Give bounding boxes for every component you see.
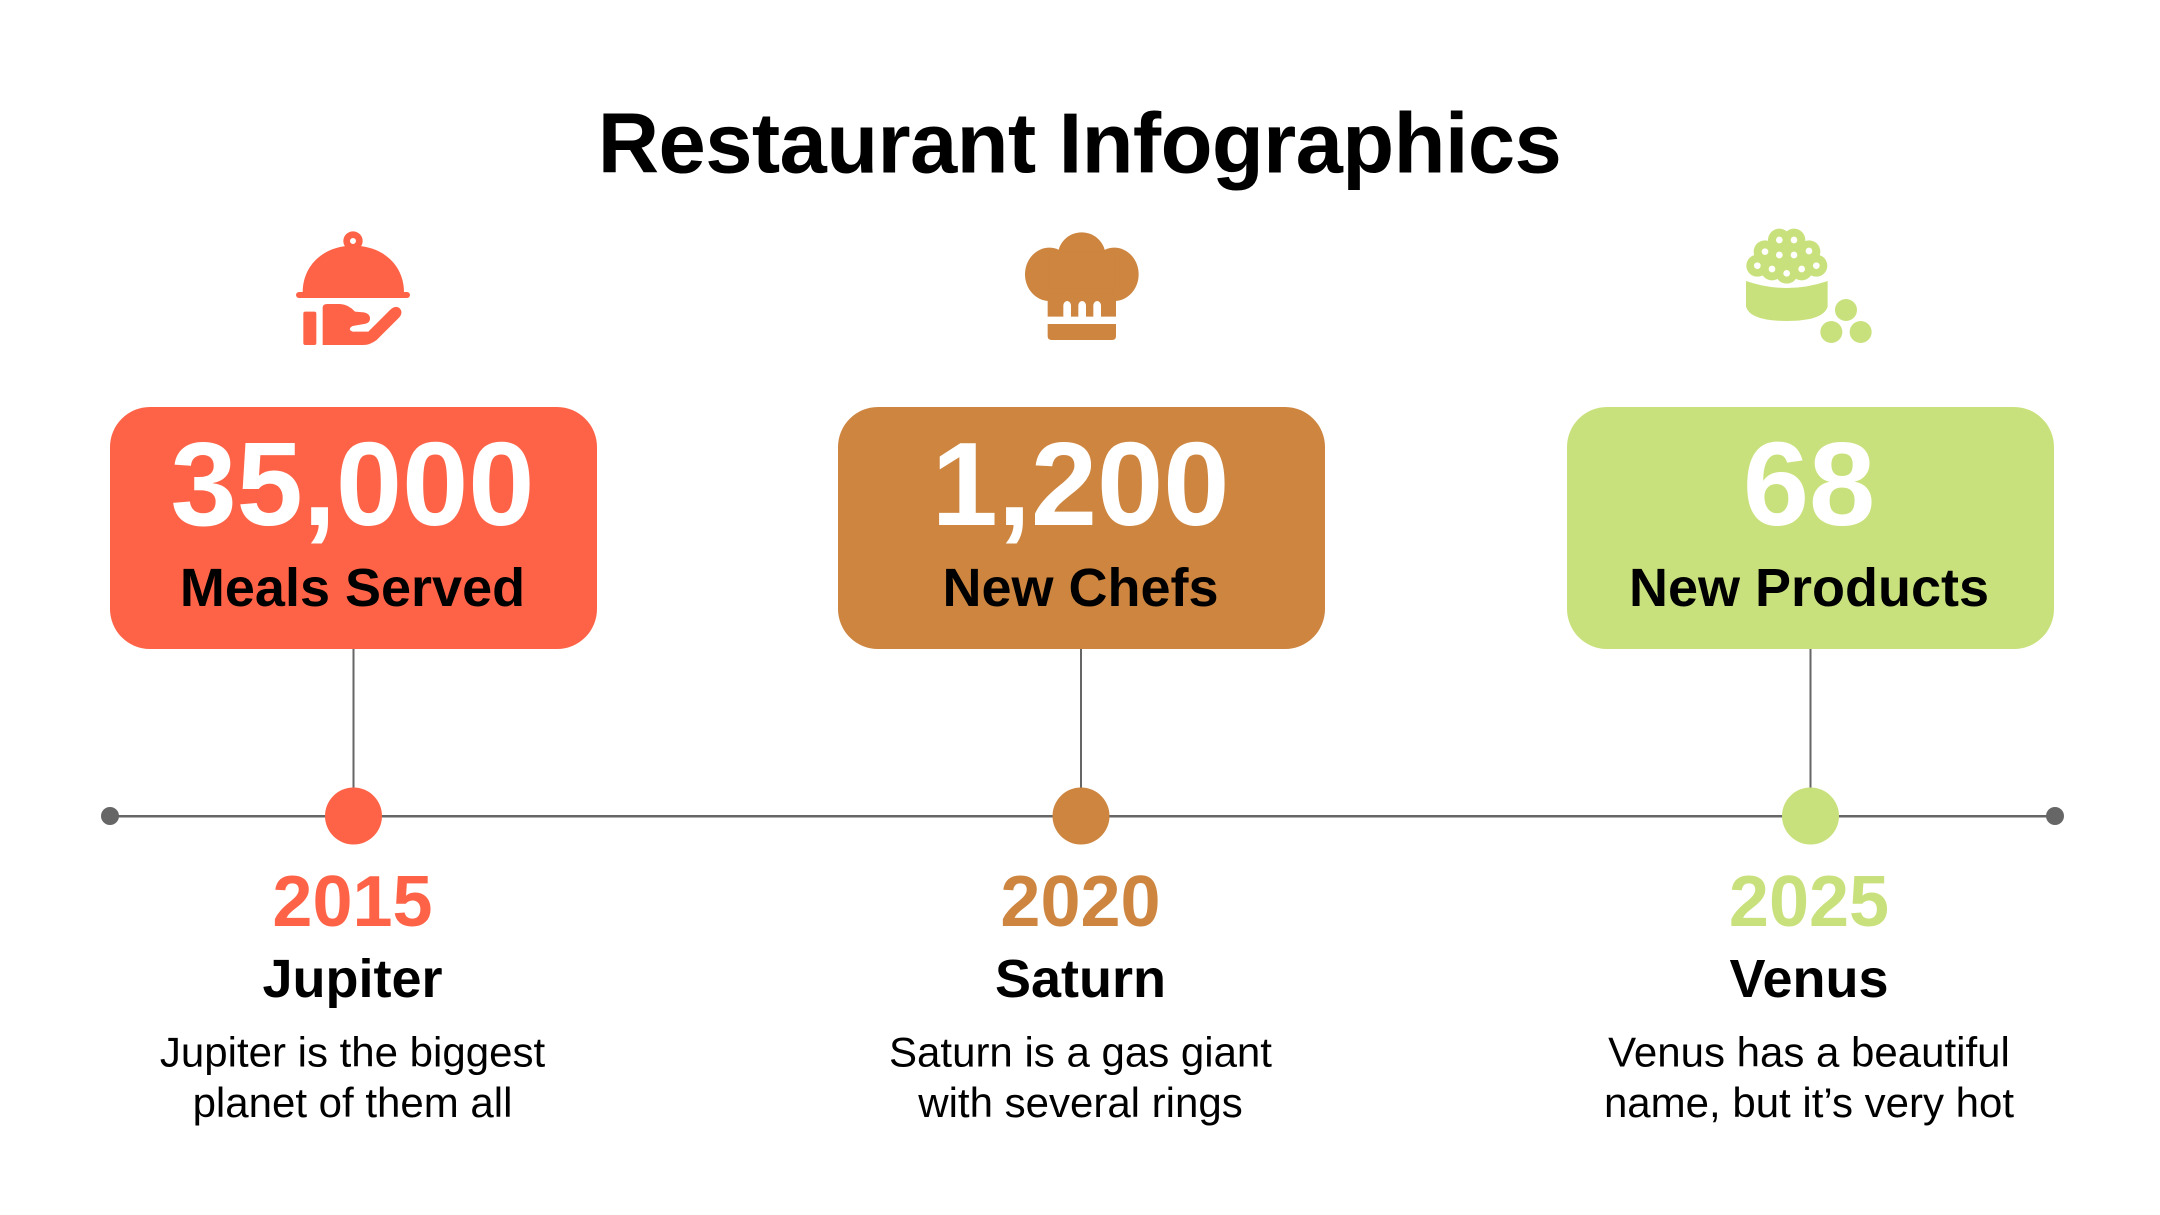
stat label: New Chefs <box>942 558 1219 618</box>
stat number: 68 <box>1743 418 1875 551</box>
stat label: New Products <box>1629 558 1989 618</box>
description: name, but it’s very hot <box>1604 1079 2014 1126</box>
year: 2015 <box>272 862 433 942</box>
connector <box>352 649 354 789</box>
icon: caviar bowl <box>1746 229 1872 343</box>
card: new products <box>1567 407 2054 649</box>
timeline axis <box>101 807 2064 825</box>
connector <box>1810 649 1812 789</box>
description: with several rings <box>917 1079 1243 1126</box>
title: Restaurant Infographics <box>598 96 1561 192</box>
stat number: 1,200 <box>932 418 1229 551</box>
card: meals served <box>110 407 597 649</box>
card: new chefs <box>838 407 1325 649</box>
timeline marker <box>325 788 382 844</box>
icon: chef hat <box>1025 232 1139 340</box>
panel: 2015 Jupiter meals served <box>110 235 597 1126</box>
description: Jupiter is the biggest <box>160 1028 545 1076</box>
year: 2025 <box>1729 862 1889 942</box>
year: 2020 <box>1000 862 1161 942</box>
description: Saturn is a gas giant <box>889 1028 1272 1076</box>
timeline marker <box>1052 788 1110 844</box>
connector <box>1080 649 1082 789</box>
heading: Venus <box>1729 949 1889 1009</box>
stat number: 35,000 <box>171 418 534 551</box>
panel: 2025 Venus new products <box>1567 229 2054 1126</box>
timeline marker <box>1782 788 1839 844</box>
description: Venus has a beautiful <box>1608 1028 2010 1076</box>
heading: Jupiter <box>262 949 443 1009</box>
stat label: Meals Served <box>180 558 525 618</box>
heading: Saturn <box>995 949 1166 1009</box>
panel: 2020 Saturn new chefs <box>838 232 1325 1126</box>
description: planet of them all <box>193 1079 512 1126</box>
icon: serving cloche on hand <box>296 235 410 345</box>
